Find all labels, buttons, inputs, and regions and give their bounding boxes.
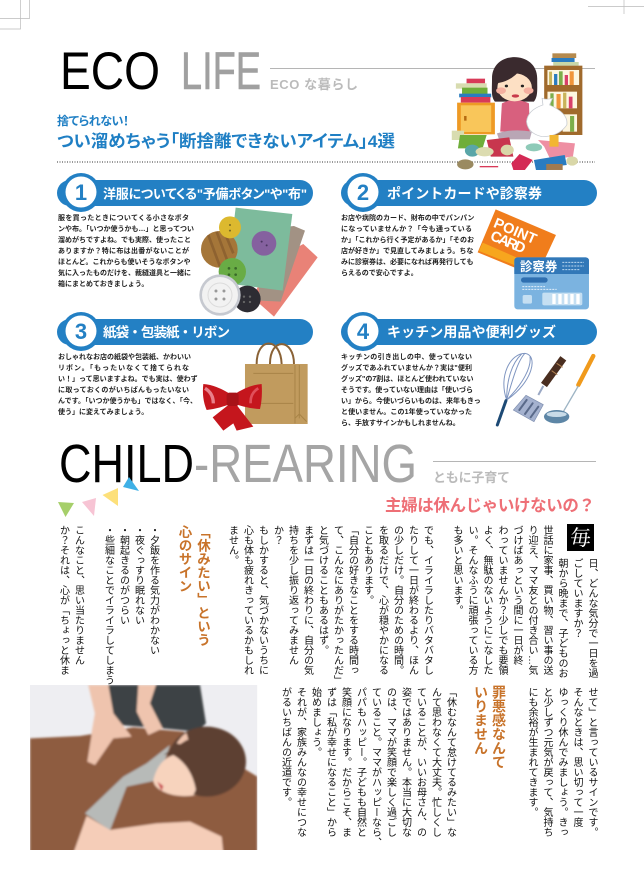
- crop marks: [0, 0, 644, 29]
- illustration: point card and patient card: POINT: [491, 216, 539, 248]
- text block 2: [341, 214, 474, 277]
- heading: housewives can't rest?: 主婦は休んじゃいけないの？: [385, 496, 595, 515]
- checklist of signs: ・夜ぐっすり眠れない: [132, 525, 144, 625]
- text block 3: [58, 352, 198, 416]
- badge 1: 1: [75, 180, 87, 205]
- article paragraph: happiness first: ずは「私が幸せになること」から: [324, 687, 336, 837]
- article paragraph: take a break: せて」と言っているサインです。: [586, 687, 597, 837]
- title: ECO LIFE: LIFE: [181, 42, 261, 101]
- section rule and label: ともに子育て: [433, 470, 510, 485]
- article intro: 日、どんな気分で一日を過: [586, 558, 597, 678]
- text block 3: い！」って思いますよね。でも実は、使わず: [58, 376, 198, 383]
- text block 2: みに診察券は、必要になれば再発行しても: [341, 259, 473, 266]
- text block 1: ほとんど。これからも使いそうなボタンや: [58, 259, 190, 266]
- text block 1: ンや布。「いつか使うかも…」と思ってつい: [58, 226, 194, 233]
- photo: massage: [30, 685, 257, 853]
- badge 2: ポイントカードや診察券: [387, 186, 542, 202]
- article intro: 朝から晩まで、子どものお: [556, 558, 567, 678]
- article paragraph: sound familiar: [58, 525, 84, 675]
- article paragraph: sound familiar: か？それは、心が「ちょっと休ま: [58, 525, 68, 675]
- text block 1: ありますか？特に布は出番がないことが: [58, 248, 189, 255]
- article paragraph: daily chores: よく、無駄のないようにこなした: [481, 525, 492, 675]
- illustration: paper bag and ribbon: [203, 343, 308, 431]
- subheading: no need for guilt: [473, 685, 507, 769]
- title: CHILD-REARING: -REARING: [194, 434, 417, 494]
- article paragraph: happiness first: ていること。ママがハッピーなら、: [370, 687, 380, 847]
- text block 3: おしゃれなお店の紙袋や包装紙、かわいい: [58, 354, 191, 361]
- badge 4: [341, 312, 597, 351]
- text block 2: になっていませんか？「今も通っている: [341, 226, 472, 233]
- badge 3: [57, 312, 313, 351]
- article paragraph: daily chores: り迎え、ママ友との付き合い…気: [526, 525, 537, 675]
- article paragraph: time for yourself: こともあります。: [362, 525, 372, 605]
- article paragraph: time for yourself: でも、イライラしたりバタバタし: [422, 525, 432, 675]
- text block 2: らえるので安心ですよ。: [341, 270, 418, 277]
- article paragraph: take a break: と少しずつ元気が戻って、気持ち: [541, 687, 552, 837]
- article paragraph: take a break: ゆっくり休んでみましょう。きっ: [556, 687, 567, 837]
- article paragraph: time for yourself: ません。: [226, 525, 238, 565]
- badge 2: [341, 173, 597, 212]
- article paragraph: daily chores: 世話に家事、買い物、習い事の送: [541, 525, 552, 675]
- drop-cap box: 毎: [570, 522, 591, 552]
- text block 4: [341, 353, 481, 427]
- article paragraph: time for yourself: の少しだけ。自分のための時間。: [392, 525, 402, 675]
- subheading: signs you need rest: 「休みたい」という: [195, 525, 210, 646]
- heading: items you can't throw away: [57, 113, 395, 151]
- text block 3: んです。「いつか使うかも」ではなく、「今、: [58, 398, 197, 405]
- badge 3: 紙袋・包装紙・リボン: [103, 324, 230, 340]
- article paragraph: time for yourself: 持ちを少し振り返ってみません: [286, 525, 298, 665]
- subheading: no need for guilt: 罪悪感なんて: [491, 685, 507, 769]
- text block 2: お店や病院のカード、財布の中でパンパン: [341, 215, 474, 222]
- article intro: [556, 558, 598, 678]
- article paragraph: daily chores: づけばあっという間に一日が終: [511, 525, 522, 665]
- article paragraph: happiness first: 「休むなんて怠けてるみたい」な: [444, 687, 456, 837]
- text block 3: 使う」に変えてみましょう。: [58, 409, 148, 416]
- article paragraph: daily chores: い。そんなふうに頑張っている方: [466, 525, 477, 675]
- title: CHILD-REARING: CHILD: [59, 434, 194, 494]
- title: CHILD-REARING: [59, 434, 417, 494]
- article intro: ごしていますか？: [571, 558, 582, 638]
- subtitle rule and label: ECO な暮らし: [270, 77, 358, 92]
- article paragraph: time for yourself: 心も体も疲れきっているかもしれ: [242, 525, 252, 675]
- text block 4: い」から。今使いづらいものは、来年もきっ: [341, 398, 481, 405]
- article paragraph: time for yourself: もしかすると、気づかないうちに: [256, 525, 268, 675]
- text block 1: 溜めがちですよね。でも実際、使ったこと: [58, 237, 191, 244]
- illustration: buttons and cloth: [199, 208, 318, 317]
- badge 4: 4: [357, 319, 370, 344]
- article paragraph: happiness first: 姿ではありません。本当に大切な: [400, 687, 410, 837]
- text block 1: 箱にまとめておきましょう。: [58, 281, 148, 288]
- badge 2: 2: [357, 180, 369, 205]
- subheading: signs you need rest: [176, 525, 210, 646]
- title: ECO LIFE: ECO: [60, 42, 160, 101]
- article paragraph: time for yourself: か？: [272, 525, 282, 545]
- text block 3: リボン。「もったいなくて捨てられな: [58, 365, 189, 372]
- article paragraph: happiness first: 笑顔になります。だからこそ、ま: [340, 687, 350, 837]
- article paragraph: time for yourself: を取るだけで、心が穏やかになる: [376, 525, 388, 675]
- text block 4: ら、手放すサインかもしれませんね。: [341, 420, 460, 427]
- article paragraph: happiness first: んて思わなくて大丈夫。忙しくし: [430, 687, 440, 837]
- illustration: point card and patient card: 診察券: [520, 259, 557, 274]
- article paragraph: happiness first: パパもハッピー。子どもも自然と: [354, 687, 366, 837]
- article paragraph: take a break: [526, 687, 598, 837]
- checklist of signs: [102, 525, 160, 685]
- badge 4: キッチン用品や便利グッズ: [387, 324, 556, 340]
- article paragraph: daily chores: [451, 525, 554, 675]
- article paragraph: happiness first: ていることが、いいお母さん、の: [414, 687, 426, 837]
- text block 1: 気に入ったものだけを、裁縫道具と一緒に: [58, 270, 191, 277]
- article paragraph: happiness first: それが、家族みんなの幸せにつな: [294, 687, 306, 837]
- article paragraph: time for yourself: [226, 525, 434, 685]
- text block 4: グッズであふれていませんか？実は"便利: [341, 365, 472, 372]
- heading: items you can't throw away: つい溜めちゃう「断捨離できないアイテム」4選: [57, 132, 395, 151]
- article paragraph: time for yourself: たりして一日が終わるより、ほん: [406, 525, 418, 675]
- article paragraph: happiness first: [280, 687, 457, 847]
- text block 4: そうです。使っていない理由は「使いづら: [341, 387, 473, 394]
- badge 3: 3: [75, 319, 87, 344]
- article paragraph: happiness first: のは、ママが笑顔で楽しく過ごし: [384, 687, 396, 837]
- subheading: no need for guilt: いりません: [473, 685, 489, 755]
- article paragraph: time for yourself: まずは一日の終わりに、自分の気: [302, 525, 312, 675]
- text block 4: キッチンの引き出しの中、使っていない: [341, 354, 472, 361]
- article paragraph: sound familiar: こんなこと、思い当たりません: [72, 525, 84, 665]
- text block 4: グッズ"の7割は、ほとんど使われていない: [341, 376, 473, 383]
- article paragraph: take a break: にも余裕が生まれてきます。: [526, 687, 537, 817]
- text block 2: か」「これから行く予定があるか」「そのお: [341, 237, 474, 244]
- bunting flags: [58, 477, 139, 517]
- checklist of signs: ・朝起きるのがつらい: [118, 525, 128, 625]
- illustration: point card and patient card: CARD: [488, 228, 528, 257]
- article paragraph: time for yourself: と気づけることもあるはず。: [316, 525, 328, 655]
- text block 2: 店が好きか」で見直してみましょう。ちな: [341, 248, 473, 255]
- article paragraph: time for yourself: 「自分の好きなことをする時間っ: [346, 525, 358, 675]
- badge 1: 洋服についてくる"予備ボタン"や"布": [103, 186, 307, 202]
- article paragraph: daily chores: も多いと思います。: [451, 525, 462, 615]
- article paragraph: daily chores: わっていませんか？少しでも要領: [496, 525, 507, 675]
- article paragraph: happiness first: 始めましょう。: [310, 687, 320, 757]
- checklist of signs: ・些細なことでイライラしてしまう: [102, 525, 114, 685]
- article paragraph: take a break: そんなときは、思い切って一度: [571, 687, 582, 827]
- text block 1: [58, 214, 194, 288]
- illustration: point card and patient card: [478, 209, 589, 309]
- badge 1: [57, 173, 313, 212]
- title: ECO LIFE: [60, 42, 261, 101]
- checklist of signs: ・夕飯を作る気力がわかない: [148, 525, 158, 655]
- heading: items you can't throw away: 捨てられない！: [57, 113, 129, 128]
- text block 1: 服を買ったときについてくる小さなボタ: [58, 215, 189, 222]
- article paragraph: time for yourself: て、こんなにありがたかったんだ」: [332, 525, 342, 685]
- text block 4: と使いません。この1年使っていなかった: [341, 409, 472, 416]
- text block 3: に取っておくのがいちばんもったいない: [58, 387, 189, 394]
- illustration: cluttered room with girl: [452, 53, 582, 170]
- subheading: signs you need rest: 心のサイン: [176, 525, 192, 592]
- article paragraph: happiness first: がるいちばんの近道です。: [280, 687, 290, 807]
- illustration: kitchen tools: [497, 353, 593, 425]
